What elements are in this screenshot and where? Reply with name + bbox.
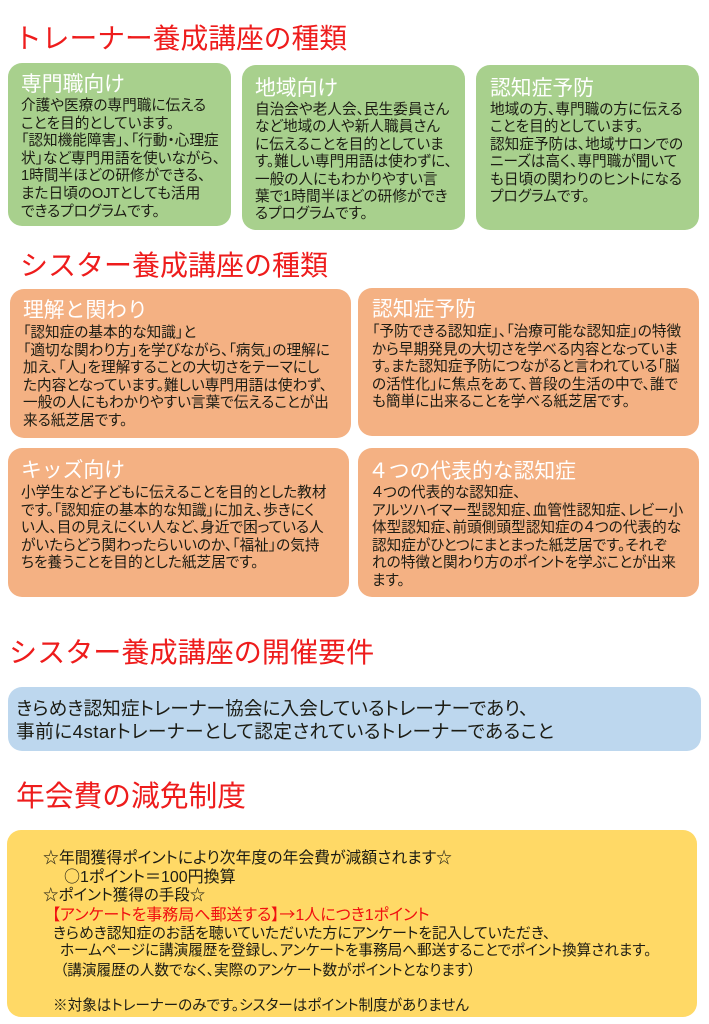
explanation 2: ホームページに講演履歴を登録し、アンケートを事務局へ郵送することでポイント換算されます。 bbox=[60, 943, 651, 959]
panel text bbox=[372, 484, 683, 589]
panel text: また日頃のOJTとしても活用 bbox=[21, 186, 200, 202]
panel text: 認知症がひとつにまとまった紙芝居です。それぞ bbox=[372, 538, 667, 554]
means heading: ☆ポイント獲得の手段☆ bbox=[43, 883, 205, 905]
panel text: 小学生など子どもに伝えることを目的とした教材 bbox=[21, 485, 326, 501]
explanation 3: （講演履歴の人数でなく、実際のアンケート数がポイントとなります） bbox=[60, 963, 475, 979]
panel text: など地域の人や新人職員さん bbox=[255, 119, 440, 135]
panel text: ことを目的としています。 bbox=[490, 119, 643, 135]
panel text: 認知症予防は、地域サロンでの bbox=[490, 137, 683, 153]
panel text: るプログラムです。 bbox=[255, 206, 368, 222]
panel text: がいたらどう関わったらいいのか、「福祉」の気持 bbox=[21, 538, 320, 554]
panel text: ニーズは高く、専門職が聞いて bbox=[490, 154, 677, 170]
panel text: も日頃の関わりのヒントになる bbox=[490, 172, 682, 188]
panel: fee reduction bbox=[7, 830, 697, 1017]
panel heading: 専門職向け bbox=[21, 73, 125, 96]
point rate: ○1ポイント＝100円換算 bbox=[64, 863, 236, 887]
panel text bbox=[21, 484, 326, 571]
panel text: す。また認知症予防につながると言われている「脳 bbox=[372, 359, 680, 375]
panel text: ます。 bbox=[372, 573, 405, 589]
panel text: 状」など専門用語を使いながら、 bbox=[21, 151, 220, 167]
panel text: ちを養うことを目的とした紙芝居です。 bbox=[21, 555, 258, 571]
requirements text bbox=[16, 698, 554, 742]
panel text: 1時間半ほどの研修ができる、 bbox=[21, 168, 205, 184]
panel text: 体型認知症、前頭側頭型認知症の４つの代表的な bbox=[372, 520, 681, 536]
panel: kids bbox=[8, 448, 349, 597]
panel: prevention bbox=[358, 288, 699, 436]
target note: ※対象はトレーナーのみです。シスターはポイント制度がありません bbox=[53, 998, 469, 1014]
panel: understanding bbox=[10, 289, 351, 438]
title: sister courses: シスター養成講座の種類 bbox=[20, 250, 328, 281]
panel text bbox=[23, 324, 330, 429]
panel text: 介護や医療の専門職に伝える bbox=[21, 98, 206, 114]
red note: 【アンケートを事務局へ郵送する】→1人につき1ポイント bbox=[52, 901, 430, 925]
panel heading: 地域向け bbox=[255, 77, 338, 100]
panel text: 葉で1時間半ほどの研修ができ bbox=[255, 189, 448, 205]
panel text: に伝えることを目的としていま bbox=[255, 137, 444, 153]
panel text: 「認知症の基本的な知識」と bbox=[23, 325, 196, 341]
panel text: 地域の方、専門職の方に伝える bbox=[490, 102, 683, 118]
panel text: い人、目の見えにくい人など、身近で困っている人 bbox=[21, 520, 324, 536]
panel text: 来る紙芝居です。 bbox=[23, 413, 127, 429]
title: requirements: シスター養成講座の開催要件 bbox=[9, 637, 374, 668]
panel heading: 認知症予防 bbox=[372, 298, 476, 321]
panel heading: キッズ向け bbox=[21, 459, 125, 482]
panel text: す。難しい専門用語は使わずに、 bbox=[255, 154, 452, 170]
panel text: ことを目的としています。 bbox=[21, 116, 174, 132]
panel text: ４つの代表的な認知症、 bbox=[372, 485, 521, 501]
panel text: 一般の人にもわかりやすい言 bbox=[255, 172, 438, 188]
panel: requirements bbox=[8, 687, 701, 751]
panel text bbox=[255, 101, 452, 222]
panel heading: 理解と関わり bbox=[23, 299, 148, 322]
requirements text: きらめき認知症トレーナー協会に入会しているトレーナーであり、 bbox=[16, 698, 528, 719]
panel: four types bbox=[358, 448, 699, 597]
panel text: 加え、「人」を理解することの大切さをテーマにし bbox=[23, 360, 319, 376]
fee text: ☆年間獲得ポイントにより次年度の年会費が減額されます☆ bbox=[43, 845, 452, 868]
explanation: きらめき認知症のお話を聴いていただいた方にアンケートを記入していただき、 bbox=[53, 926, 550, 942]
panel text: 「適切な関わり方」を学びながら、「病気」の理解に bbox=[23, 343, 330, 359]
panel: community bbox=[242, 65, 465, 230]
panel text: 自治会や老人会、民生委員さん bbox=[255, 102, 449, 118]
panel text: も簡単に出来ることを学べる紙芝居です。 bbox=[372, 394, 630, 410]
panel text: 一般の人にもわかりやすい言葉で伝えることが出 bbox=[23, 395, 329, 411]
panel text bbox=[21, 97, 220, 220]
panel text: 「認知機能障害」、「行動・心理症 bbox=[21, 133, 219, 149]
panel text: れの特徴と関わり方のポイントを学ぶことが出来 bbox=[372, 555, 676, 571]
title: fee reduction: 年会費の減免制度 bbox=[16, 781, 246, 813]
panel text: の活性化」に焦点をあて、普段の生活の中で、誰で bbox=[372, 376, 678, 392]
panel text: から早期発見の大切さを学べる内容となっていま bbox=[372, 342, 678, 358]
panel text: プログラムです。 bbox=[490, 189, 590, 205]
panel text: 「予防できる認知症」、「治療可能な認知症」の特徴 bbox=[372, 324, 681, 340]
panel: dementia prevention bbox=[476, 65, 699, 230]
panel text: アルツハイマー型認知症、血管性認知症、レビー小 bbox=[372, 503, 683, 519]
panel heading: 認知症予防 bbox=[490, 77, 594, 100]
panel text: できるプログラムです。 bbox=[21, 204, 160, 220]
title: trainer courses: トレーナー養成講座の種類 bbox=[14, 23, 347, 54]
requirements text: 事前に4starトレーナーとして認定されているトレーナーであること bbox=[16, 721, 554, 742]
panel text bbox=[490, 101, 683, 205]
panel text: た内容となっています。難しい専門用語は使わず、 bbox=[23, 378, 327, 394]
panel text: です。「認知症の基本的な知識」に加え、歩きにく bbox=[21, 502, 314, 518]
panel text bbox=[372, 323, 681, 410]
panel: professional bbox=[8, 63, 231, 226]
panel heading: ４つの代表的な認知症 bbox=[368, 460, 576, 483]
